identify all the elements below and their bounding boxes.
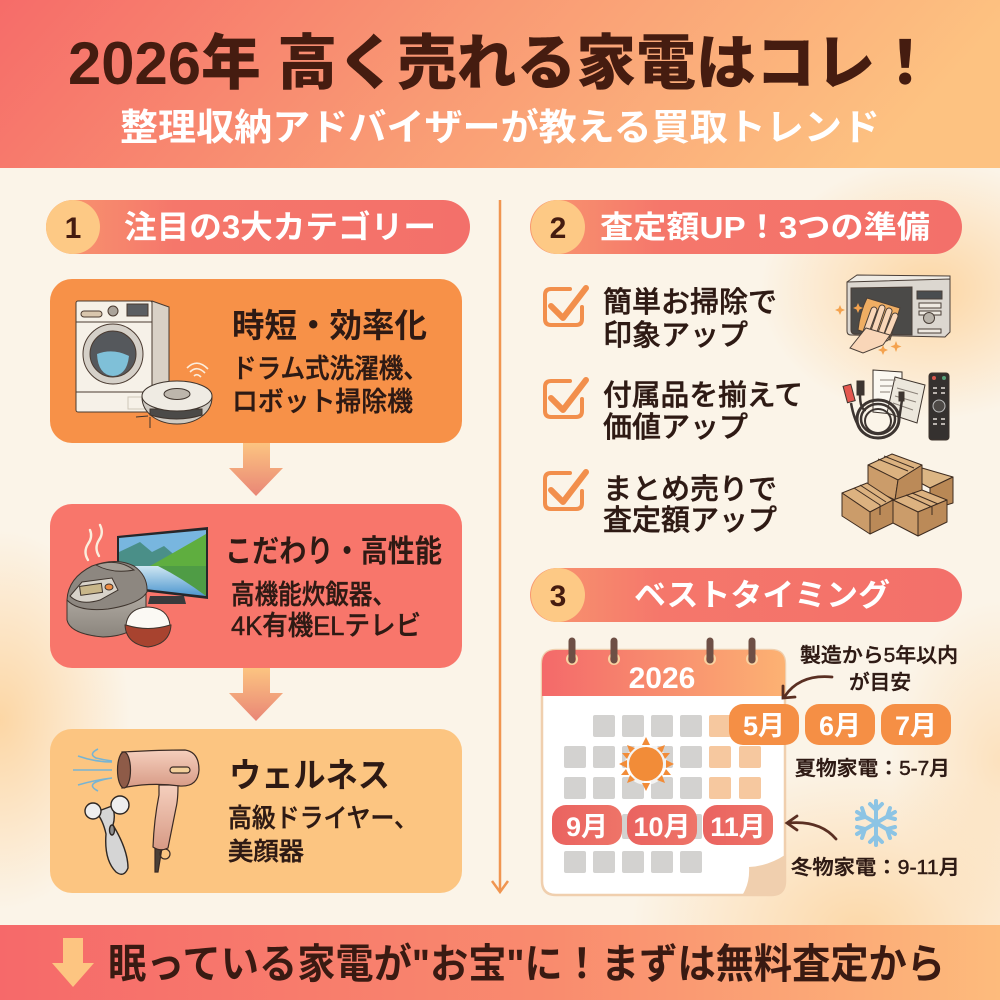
icon: washing machine (76, 301, 169, 412)
section 1 heading: 注目の3大カテゴリー (124, 209, 436, 245)
section 2 heading: 査定額UP！3つの準備 (600, 210, 930, 245)
summer month pills: 7月 (895, 711, 937, 741)
label: summer appliances: 夏物家電：5-7月 (795, 757, 950, 780)
section 2 heading (530, 200, 962, 254)
card: ウェルネス (50, 729, 462, 893)
summer month pills (729, 704, 951, 745)
icon: microwave being wiped (835, 275, 950, 355)
arrow: note to calendar (783, 677, 832, 698)
icon: down arrow (52, 938, 94, 987)
summer month pills: 6月 (819, 711, 861, 741)
note: manufacture age (800, 644, 958, 694)
calendar grid (564, 715, 761, 873)
section 3 heading: ベストタイミング (634, 578, 890, 613)
arrow: down 2 (229, 668, 283, 721)
checklist item 1: 簡単お掃除で (603, 286, 777, 319)
card: 時短・効率化: ロボット掃除機 (232, 387, 413, 417)
binder rings (567, 641, 757, 664)
section 3 heading (530, 568, 962, 622)
card: こだわり・高性能 (50, 504, 462, 668)
card: こだわり・高性能: 4K有機ELテレビ (231, 611, 421, 641)
card text: 時短・効率化 (232, 307, 427, 344)
calendar (542, 641, 785, 895)
arrow: winter to calendar (787, 816, 836, 839)
icon: television (117, 527, 208, 604)
note: manufacture age: が目安 (849, 671, 911, 694)
section 1 heading (46, 200, 470, 254)
icon: beauty roller (85, 796, 129, 874)
icon: steam (86, 525, 102, 560)
checklist item 3: まとめ売りで (603, 473, 777, 506)
card: こだわり・高性能: 高機能炊飯器、 (231, 580, 396, 610)
section 2 heading: 2 (550, 212, 566, 245)
icon: cardboard boxes (842, 454, 953, 536)
subtitle: 整理収納アドバイザーが教える買取トレンド (120, 107, 880, 148)
winter month pills: 10月 (633, 812, 691, 842)
arrow: down 1 (229, 443, 283, 496)
icon: snowflake (857, 801, 895, 845)
icon: robot vacuum (136, 363, 212, 428)
checklist item 3: 査定額アップ (603, 504, 777, 537)
card text: こだわり・高性能 (225, 534, 442, 569)
summer month pills: 5月 (743, 711, 785, 741)
note: manufacture age: 製造から5年以内 (800, 644, 958, 667)
card: ウェルネス: 高級ドライヤー、 (228, 803, 418, 833)
icon: rice cooker (67, 562, 147, 637)
winter month pills: 9月 (566, 812, 608, 842)
winter month pills (552, 805, 773, 845)
footer text: 眠っている家電が"お宝"に！まずは無料査定から (108, 941, 945, 987)
checklist item 2: 価値アップ (603, 411, 748, 444)
card: ウェルネス: 美顔器 (228, 838, 304, 866)
divider arrow (492, 200, 508, 892)
winter month pills: 11月 (710, 812, 766, 842)
label: winter appliances: 冬物家電：9-11月 (791, 856, 960, 879)
icon: rice bowl (125, 607, 171, 647)
checklist item 1 (545, 275, 950, 355)
section 3 heading: 3 (550, 580, 566, 613)
checklist item 3 (545, 454, 953, 537)
checklist item 2 (545, 370, 949, 444)
card text: ウェルネス (229, 757, 390, 795)
icon: checkbox (545, 472, 586, 509)
icon: hair dryer (73, 749, 199, 872)
title: 2026年 高く売れる家電はコレ！ (68, 30, 935, 97)
card: 時短・効率化: ドラム式洗濯機、 (232, 354, 428, 384)
section 1 heading: 1 (65, 212, 81, 245)
calendar year: 2026 (629, 662, 695, 695)
header banner (0, 0, 1000, 168)
icon: checkbox (545, 288, 586, 325)
page fold (743, 855, 785, 894)
checklist item 1: 印象アップ (603, 319, 748, 352)
checklist item 2: 付属品を揃えて (603, 379, 803, 412)
card: 時短・効率化 (50, 279, 462, 443)
icon: accessories (843, 370, 949, 440)
icon: sun (619, 737, 674, 791)
icon: checkbox (545, 380, 586, 417)
footer banner (0, 925, 1000, 1000)
